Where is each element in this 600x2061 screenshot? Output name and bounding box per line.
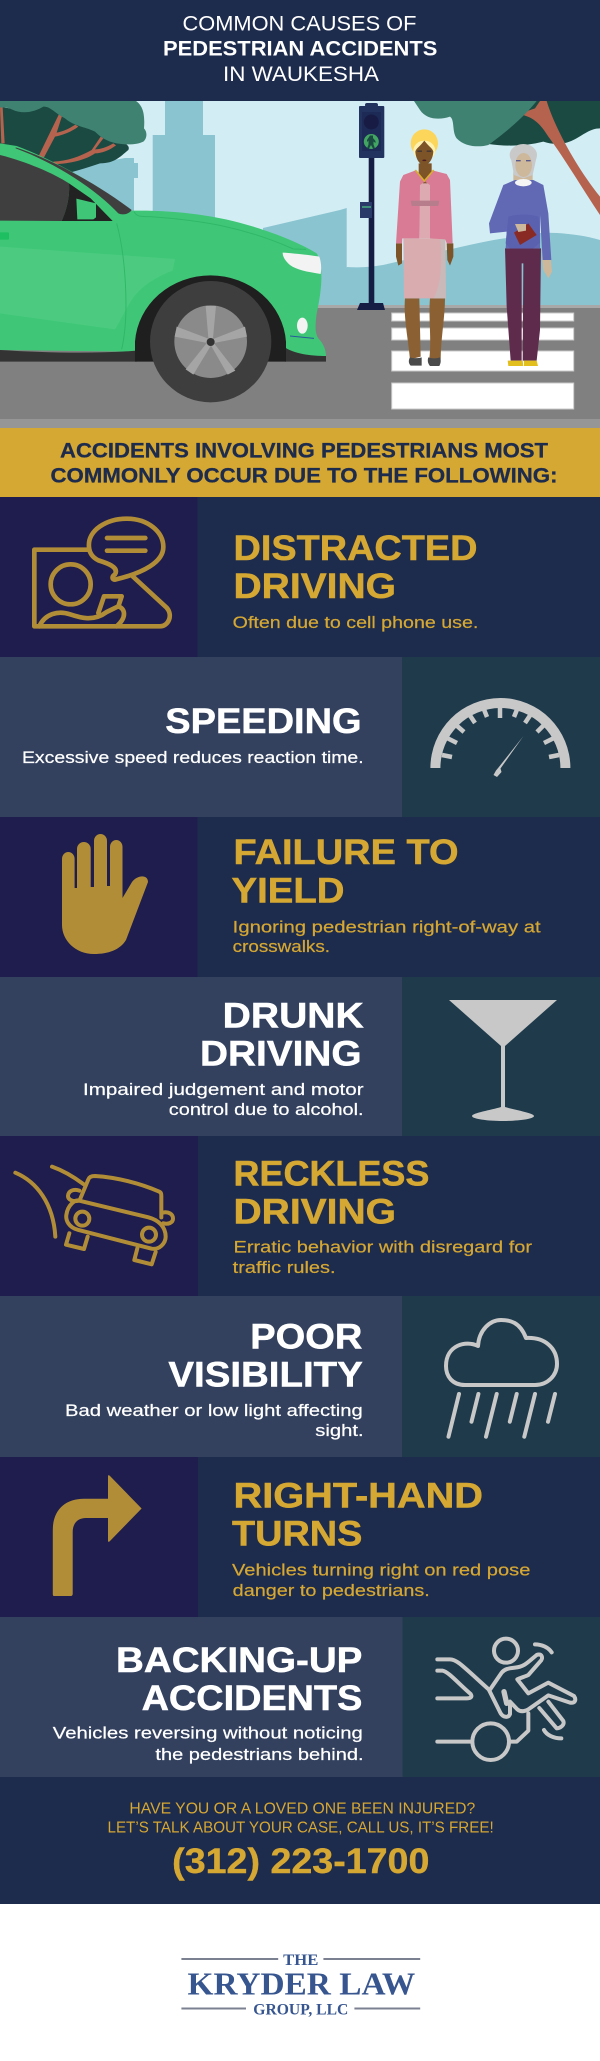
description: Excessive speed reduces reaction time. xyxy=(22,748,364,767)
pedestrian: older woman xyxy=(489,144,552,366)
panel: distracted driving xyxy=(0,497,600,657)
panel: reckless driving: traffic rules. xyxy=(233,1258,336,1277)
description: Bad weather or low light affecting xyxy=(65,1401,363,1420)
heading: POOR xyxy=(250,1317,362,1356)
panel: reckless driving xyxy=(0,1136,600,1296)
call to action text: HAVE YOU OR A LOVED ONE BEEN INJURED? xyxy=(129,1801,475,1818)
panel: poor visibility: sight. xyxy=(315,1421,364,1440)
logo: THE xyxy=(283,1952,318,1969)
pedestrian: woman in pink xyxy=(396,129,453,366)
panel: right-hand turns: danger to pedestrians. xyxy=(233,1581,430,1600)
panel: drunk driving: DRIVING xyxy=(200,1035,362,1074)
description: Erratic behavior with disregard for xyxy=(234,1237,532,1256)
logo: KRYDER LAW xyxy=(188,1965,415,2001)
description: Often due to cell phone use. xyxy=(233,613,478,632)
panel: right-hand turns: TURNS xyxy=(232,1514,362,1554)
heading: DRUNK xyxy=(223,997,364,1036)
heading: DISTRACTED xyxy=(234,529,478,568)
title: PEDESTRIAN ACCIDENTS xyxy=(163,38,437,61)
tree: right xyxy=(414,101,600,215)
heading: RECKLESS xyxy=(234,1154,429,1193)
green car xyxy=(0,143,326,402)
crosswalk xyxy=(392,313,574,409)
banner xyxy=(0,428,600,497)
icon: phone and speech bubble xyxy=(34,519,170,626)
description: Vehicles reversing without noticing xyxy=(53,1723,363,1742)
icon: right turn arrow xyxy=(53,1475,142,1596)
banner: COMMONLY OCCUR DUE TO THE FOLLOWING: xyxy=(50,465,558,488)
icon: pedestrian struck by car xyxy=(437,1639,575,1760)
logo xyxy=(181,1952,420,2019)
panel: poor visibility xyxy=(0,1296,600,1457)
panel: distracted driving: DRIVING xyxy=(234,567,396,606)
icon: raised hand xyxy=(62,834,148,954)
banner: ACCIDENTS INVOLVING PEDESTRIANS MOST xyxy=(60,440,548,463)
description: Vehicles turning right on red pose xyxy=(232,1560,530,1580)
city skyline xyxy=(60,101,600,310)
panel: drunk driving xyxy=(0,977,600,1136)
title: COMMON CAUSES OF xyxy=(182,13,416,36)
heading: FAILURE TO xyxy=(234,833,458,872)
title: IN WAUKESHA xyxy=(223,63,379,86)
road xyxy=(0,305,600,428)
heading: SPEEDING xyxy=(165,702,362,741)
heading: RIGHT-HAND xyxy=(234,1477,483,1516)
panel: failure to yield xyxy=(0,817,600,977)
description: Ignoring pedestrian right-of-way at xyxy=(233,918,541,937)
icon: speedometer xyxy=(430,698,570,777)
icon: rain cloud xyxy=(446,1320,557,1437)
heading: BACKING-UP xyxy=(116,1641,362,1680)
title xyxy=(163,13,437,86)
icon: swerving car xyxy=(15,1167,173,1264)
tree: left xyxy=(0,101,146,173)
panel: call to action: LET’S TALK ABOUT YOUR CASE, CALL US, IT’S FREE! xyxy=(108,1820,494,1837)
panel: speeding xyxy=(0,657,600,817)
description: Impaired judgement and motor xyxy=(83,1080,364,1099)
panel: reckless driving: DRIVING xyxy=(234,1192,396,1231)
panel: backing-up accidents xyxy=(0,1617,600,1777)
panel: failure to yield: YIELD xyxy=(232,872,344,911)
panel: backing-up accidents: the pedestrians behind. xyxy=(155,1745,364,1764)
header panel xyxy=(0,0,600,101)
panel: poor visibility: VISIBILITY xyxy=(168,1356,363,1395)
phone number: (312) 223-1700 xyxy=(172,1842,429,1881)
logo: GROUP, LLC xyxy=(253,2002,348,2019)
panel: right-hand turns xyxy=(0,1457,600,1617)
pedestrian signal xyxy=(357,103,385,310)
panel: backing-up accidents: ACCIDENTS xyxy=(142,1679,362,1718)
panel: drunk driving: control due to alcohol. xyxy=(169,1100,364,1119)
panel: call to action xyxy=(0,1777,600,1904)
icon: martini glass xyxy=(449,1000,557,1121)
illustration: street scene xyxy=(0,101,600,428)
panel: failure to yield: crosswalks. xyxy=(233,937,330,956)
